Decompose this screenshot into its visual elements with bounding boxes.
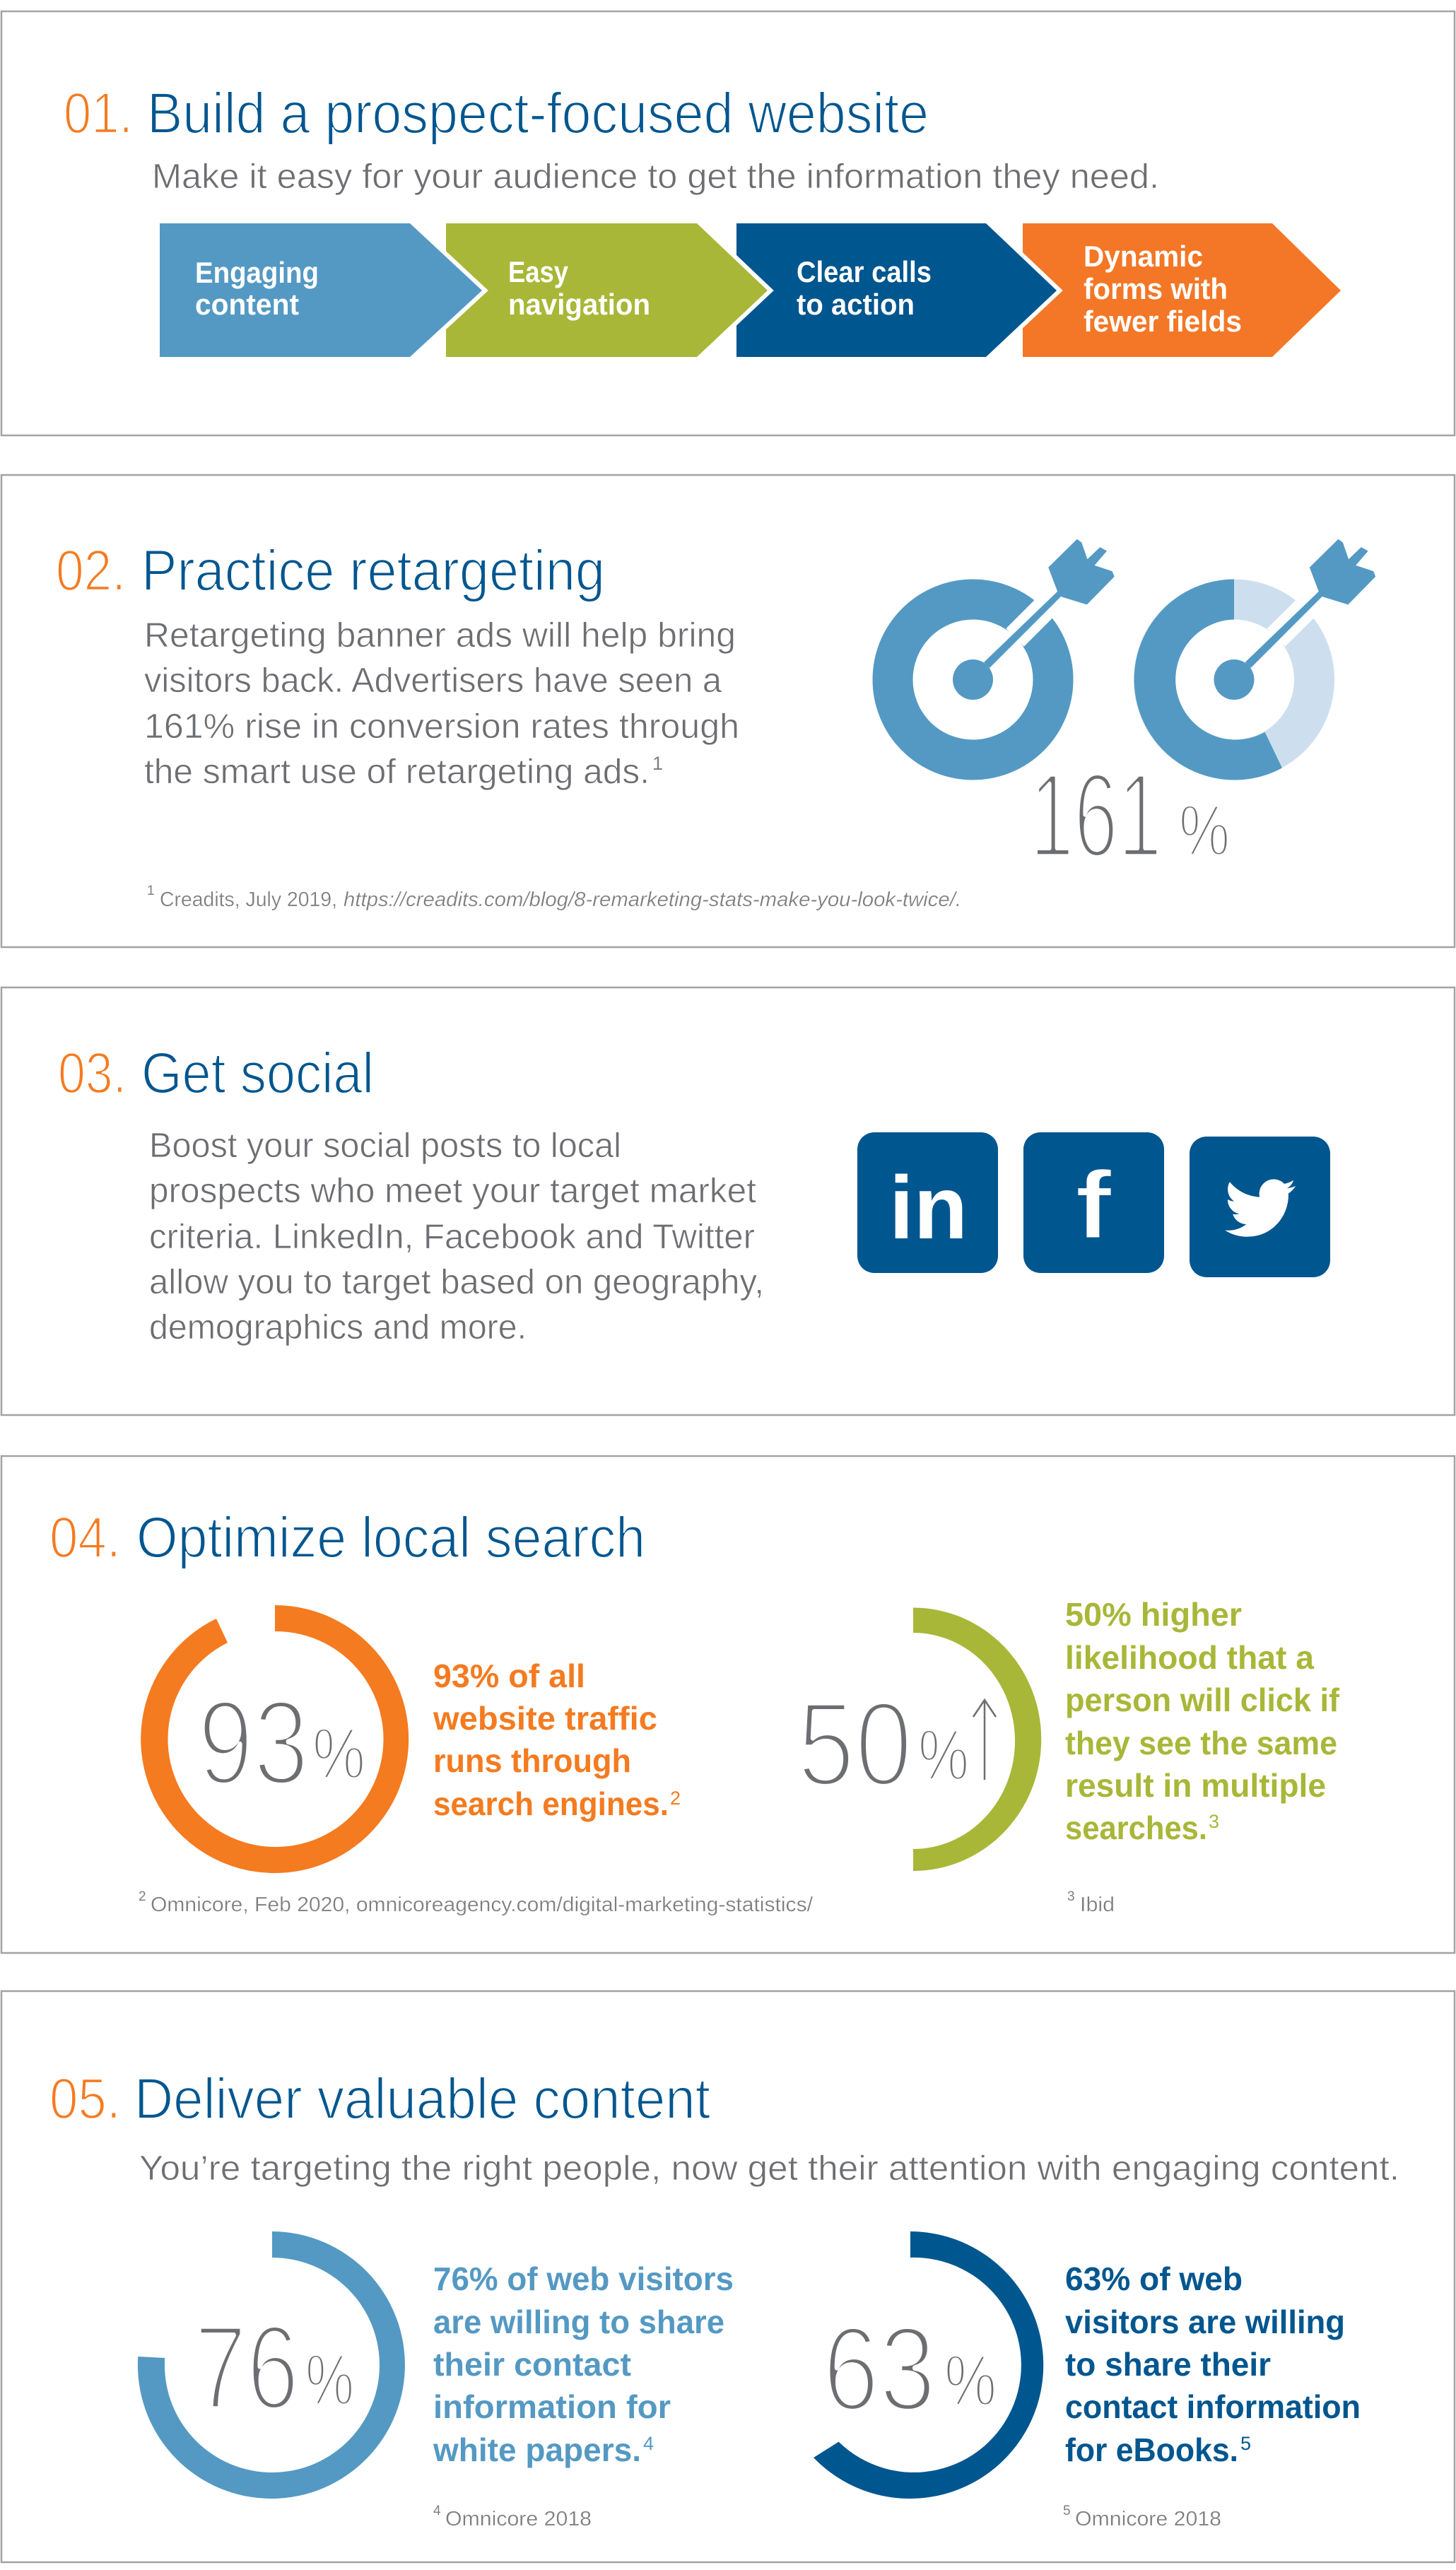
chart: 76% arc	[138, 2231, 405, 2499]
icon: facebook	[1023, 1132, 1164, 1273]
body text: retargeting: 161% rise in conversion rates through	[144, 708, 739, 746]
heading: 04: 04.	[49, 1506, 121, 1570]
text: 50% higher likelihood: person will click if	[1065, 1682, 1340, 1718]
arrow: clear calls to action: to action	[797, 288, 915, 321]
text: 50% higher likelihood: likelihood that a	[1065, 1639, 1314, 1676]
text: 63% ebooks: visitors are willing	[1065, 2304, 1345, 2340]
body text: social: Boost your social posts to local	[149, 1127, 621, 1165]
footnote 2: 2	[139, 1889, 146, 1904]
text: 76% white papers: their contact	[433, 2346, 631, 2383]
heading: 05: Deliver valuable content	[134, 2067, 710, 2131]
text: 63% ebooks: 63% of web	[1065, 2260, 1243, 2297]
icon: full target	[893, 540, 1114, 760]
heading: 02: 02.	[56, 539, 126, 603]
footnote 3	[1067, 1889, 1115, 1916]
footnote 3: 3	[1067, 1889, 1075, 1904]
body text: social: demographics and more.	[149, 1308, 527, 1346]
text: 93% of all traffic: 93% of all	[433, 1657, 585, 1694]
stat: 161%: %	[1179, 790, 1230, 871]
footnote 3: Ibid	[1080, 1894, 1115, 1916]
arrow: dynamic forms	[1023, 223, 1341, 357]
chart: 93% ring	[141, 1605, 409, 1873]
panel: 03 get social	[1, 987, 1455, 1415]
heading: 01: Build a prospect-focused website	[147, 81, 929, 146]
footnote 1: https://creadits.com/blog/8-remarketing-stats-make-you-look-twice/.	[344, 888, 961, 911]
panel: 04 optimize local search	[1, 1456, 1455, 1953]
heading: 05: 05.	[49, 2067, 121, 2131]
text: 63% ebooks: 5	[1240, 2433, 1251, 2454]
text: 93% of all traffic: website traffic	[433, 1700, 657, 1737]
heading: 03: Get social	[141, 1041, 374, 1105]
arrow: clear calls to action	[736, 223, 1057, 357]
stat: 50% up: %	[918, 1715, 969, 1795]
arrow: engaging content: content	[195, 288, 299, 321]
arrow process	[160, 223, 1341, 357]
footnote 4: 4	[433, 2504, 441, 2518]
icon: linkedin	[857, 1132, 998, 1273]
text: 93% of all traffic: search engines.	[433, 1785, 669, 1822]
heading: 01: 01.	[64, 81, 133, 146]
subtitle: 01: Make it easy for your audience to get the information they need.	[152, 158, 1159, 196]
text: 50% higher likelihood	[1065, 1596, 1340, 1846]
footnote 5: 5	[1063, 2504, 1071, 2518]
text: 76% white papers: information for	[433, 2388, 671, 2425]
chart: 63% arc	[814, 2231, 1043, 2499]
stat: 76%: 76	[194, 2301, 299, 2435]
stat: 63%: %	[944, 2340, 997, 2421]
arrow: dynamic forms: fewer fields	[1084, 305, 1242, 338]
stat: 161%: 161	[1030, 749, 1162, 883]
text: 76% white papers: 76% of web visitors	[433, 2260, 734, 2297]
heading: 03: 03.	[58, 1041, 127, 1105]
arrow: easy navigation: Easy	[508, 255, 569, 288]
icon: facebook: f	[1075, 1151, 1112, 1260]
icon: partial target	[1134, 540, 1375, 780]
footnote 5: Omnicore 2018	[1075, 2508, 1221, 2530]
heading: 02: Practice retargeting	[141, 539, 605, 603]
text: 93% of all traffic	[433, 1657, 681, 1822]
panel: 01 build a prospect-focused website	[1, 11, 1455, 435]
text: 63% ebooks: for eBooks.	[1065, 2431, 1238, 2468]
body text: retargeting: 1	[652, 753, 663, 774]
footnote 1	[147, 884, 961, 911]
heading: 04: Optimize local search	[136, 1506, 645, 1570]
text: 76% white papers: white papers.	[433, 2431, 641, 2468]
arrow: engaging content	[160, 223, 482, 357]
text: 50% higher likelihood: 3	[1209, 1811, 1219, 1832]
subtitle: 05: You’re targeting the right people, now get their attention with engaging content.	[139, 2149, 1399, 2188]
text: 63% ebooks	[1065, 2260, 1361, 2468]
footnote 2: Omnicore, Feb 2020, omnicoreagency.com/digital-marketing-statistics/	[151, 1894, 814, 1916]
body text: retargeting: Retargeting banner ads will help bring	[144, 616, 736, 655]
text: 50% higher likelihood: 50% higher	[1065, 1596, 1242, 1633]
footnote 1: 1	[147, 884, 155, 898]
body text: retargeting	[144, 616, 739, 791]
text: 76% white papers	[433, 2260, 734, 2468]
arrow: dynamic forms: forms with	[1084, 272, 1228, 305]
body text: social: criteria. LinkedIn, Facebook and Twitter	[149, 1218, 755, 1256]
text: 63% ebooks: contact information	[1065, 2388, 1361, 2425]
body text: social	[149, 1127, 764, 1346]
footnote 1: Creadits, July 2019,	[160, 888, 337, 911]
stat: 93%: 93	[198, 1676, 309, 1810]
text: 50% higher likelihood: result in multiple	[1065, 1767, 1326, 1804]
panel: 02 practice retargeting	[1, 475, 1455, 947]
arrow: dynamic forms: Dynamic	[1084, 240, 1203, 273]
text: 93% of all traffic: runs through	[433, 1742, 631, 1779]
arrow: easy navigation: navigation	[508, 288, 650, 321]
text: 76% white papers: 4	[643, 2433, 654, 2454]
icon: linkedin: in	[889, 1158, 968, 1257]
stat: 50% up	[797, 1677, 996, 1812]
body text: social: allow you to target based on geography,	[149, 1263, 764, 1301]
text: 93% of all traffic: 2	[670, 1788, 681, 1809]
body text: social: prospects who meet your target market	[149, 1172, 756, 1210]
body text: retargeting: visitors back. Advertisers have seen a	[144, 662, 722, 700]
arrow: engaging content: Engaging	[195, 256, 319, 289]
stat: 63%: 63	[823, 2302, 936, 2436]
stat: 76%: %	[305, 2340, 354, 2420]
text: 76% white papers: are willing to share	[433, 2304, 724, 2340]
chart: 50% arc	[797, 1607, 1041, 1871]
heading: 03	[58, 1041, 374, 1105]
text: 63% ebooks: to share their	[1065, 2346, 1271, 2383]
icon: twitter	[1190, 1137, 1330, 1277]
text: 50% higher likelihood: searches.	[1065, 1809, 1207, 1846]
arrow: easy navigation	[446, 223, 768, 357]
body text: retargeting: the smart use of retargeting ads.	[144, 753, 650, 791]
panel: 05 deliver valuable content	[1, 1991, 1455, 2562]
stat: 93%: %	[312, 1713, 365, 1794]
arrow: clear calls to action: Clear calls	[797, 255, 932, 288]
text: 50% higher likelihood: they see the same	[1065, 1725, 1337, 1761]
stat: 50% up: 50	[797, 1677, 912, 1812]
footnote 4: Omnicore 2018	[445, 2508, 592, 2530]
